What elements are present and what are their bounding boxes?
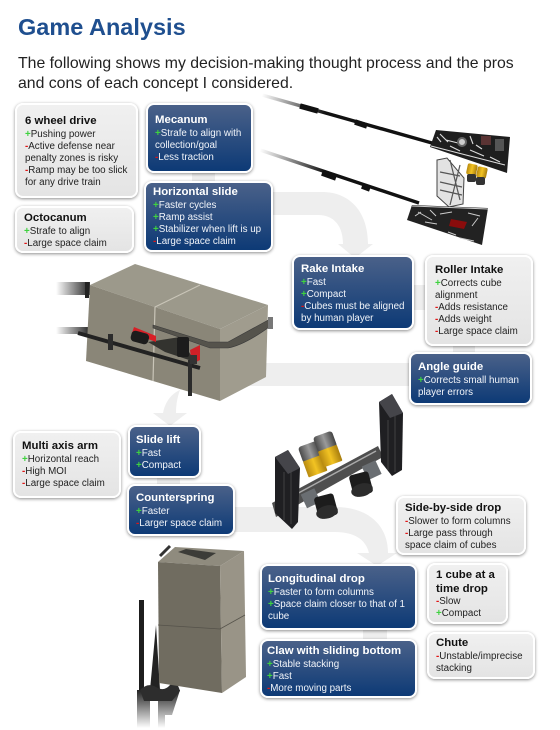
panel: Chute: -Unstable/imprecise [436,651,523,662]
panel: Side-by-side drop [396,496,526,555]
image: drop mechanism with yellow rollers [272,394,403,529]
panel: 6 wheel drive: +Pushing power [25,129,96,140]
panel: 1 cube at a time drop: +Compact [436,608,481,619]
panel: Roller Intake: -Adds resistance [435,302,508,313]
panel: Counterspring: Counterspring [136,492,214,504]
title: Game Analysis [18,14,186,40]
intro text: The following shows my decision-making thought process and the pros [18,55,514,72]
panel: Mecanum: -Less traction [155,152,214,163]
connector bands between option boxes [157,170,475,642]
panel: Roller Intake: -Adds weight [435,314,492,325]
panel: Roller Intake: -Large space claim [435,326,518,337]
panel: Claw with sliding bottom [260,639,417,698]
panel: Longitudinal drop: +Space claim closer to that of 1 [268,599,405,610]
panel: Rake Intake: +Compact [301,289,346,300]
panel: Side-by-side drop: -Large pass through [405,528,493,539]
panel: Mecanum: Mecanum [155,114,208,126]
panel: Rake Intake [292,255,414,330]
panel: Angle guide: player errors [418,387,473,398]
panel: Roller Intake: +Corrects cube [435,278,502,289]
panel: Mecanum [146,103,253,173]
image: robot holding two cubes side view [56,264,273,401]
panel: 6 wheel drive: for any drive train [25,177,101,188]
panel: Octocanum: Octocanum [24,212,87,224]
panel: Horizontal slide: -Large space claim [153,236,236,247]
panel: Counterspring [127,484,235,536]
panel: Claw with sliding bottom: Claw with sliding bottom [267,645,401,657]
panel: Horizontal slide: +Faster cycles [153,200,216,211]
panel: Octocanum: +Strafe to align [24,226,90,237]
panel: Longitudinal drop: Longitudinal drop [268,573,365,585]
panel: Mecanum: collection/goal [155,140,217,151]
panel: Chute [427,632,535,679]
panel: Chute: Chute [436,637,468,649]
panel: Slide lift [128,425,201,478]
panel: Multi axis arm: -High MOI [22,466,67,477]
arrow: angle guide to slide lift [153,363,412,426]
panel: Rake Intake: -Cubes must be aligned [301,301,404,312]
panel: Longitudinal drop: +Faster to form columns [268,587,374,598]
intro text: and cons of each concept I considered. [18,75,293,92]
panel: Slide lift: Slide lift [136,434,180,446]
panel: Rake Intake: by human player [301,313,373,324]
arrow: counterspring to longitudinal drop [230,507,397,566]
panel: Angle guide [409,352,532,405]
panel: Slide lift: +Fast [136,448,161,459]
panel: Multi axis arm: Multi axis arm [22,440,98,452]
panel: Rake Intake: Rake Intake [301,263,364,275]
panel: Longitudinal drop: cube [268,611,289,622]
panel: Roller Intake: alignment [435,290,477,301]
panel: Angle guide: +Corrects small human [418,375,519,386]
panel: 1 cube at a time drop: -Slow [436,596,461,607]
panel: Side-by-side drop: space claim of cubes [405,540,496,551]
panel: 6 wheel drive: -Ramp may be too slick [25,165,127,176]
panel: Counterspring: -Larger space claim [136,518,222,529]
panel: Horizontal slide [144,181,273,252]
panel: Claw with sliding bottom: -More moving parts [267,683,351,694]
panel: Multi axis arm [13,431,121,498]
panel: Multi axis arm: +Horizontal reach [22,454,99,465]
panel: Roller Intake: Roller Intake [435,264,503,276]
panel: 6 wheel drive: 6 wheel drive [25,115,97,127]
panel: Horizontal slide: +Stabilizer when lift is up [153,224,261,235]
panel: Claw with sliding bottom: +Stable stacking [267,659,339,670]
image: robot lifting stacked cubes [137,546,246,728]
panel: Slide lift: +Compact [136,460,181,471]
panel: Mecanum: +Strafe to align with [155,128,241,139]
panel: Multi axis arm: -Large space claim [22,478,105,489]
panel: Claw with sliding bottom: +Fast [267,671,292,682]
panel: Horizontal slide: Horizontal slide [153,186,238,198]
panel: Side-by-side drop: -Slower to form columns [405,516,511,527]
panel: Rake Intake: +Fast [301,277,326,288]
panel: 1 cube at a time drop [427,563,508,624]
panel: Longitudinal drop [260,564,417,630]
panel: Counterspring: +Faster [136,506,170,517]
image: top view of intake and arms [260,95,510,245]
intro text [18,55,514,92]
panel: 6 wheel drive [15,103,138,198]
panel: 1 cube at a time drop: 1 cube at a [436,569,495,581]
panel: Side-by-side drop: Side-by-side drop [405,502,501,514]
panel: 6 wheel drive: -Active defense near [25,141,115,152]
panel: Octocanum [15,206,134,253]
panel: Octocanum: -Large space claim [24,238,107,249]
panel: Chute: stacking [436,663,472,674]
panel: 1 cube at a time drop: time drop [436,583,488,595]
panel: Angle guide: Angle guide [418,361,483,373]
arrow: horizontal slide to rake intake [270,192,373,258]
panel: 6 wheel drive: penalty zones is risky [25,153,118,164]
panel: Roller Intake [425,255,533,346]
panel: Horizontal slide: +Ramp assist [153,212,213,223]
